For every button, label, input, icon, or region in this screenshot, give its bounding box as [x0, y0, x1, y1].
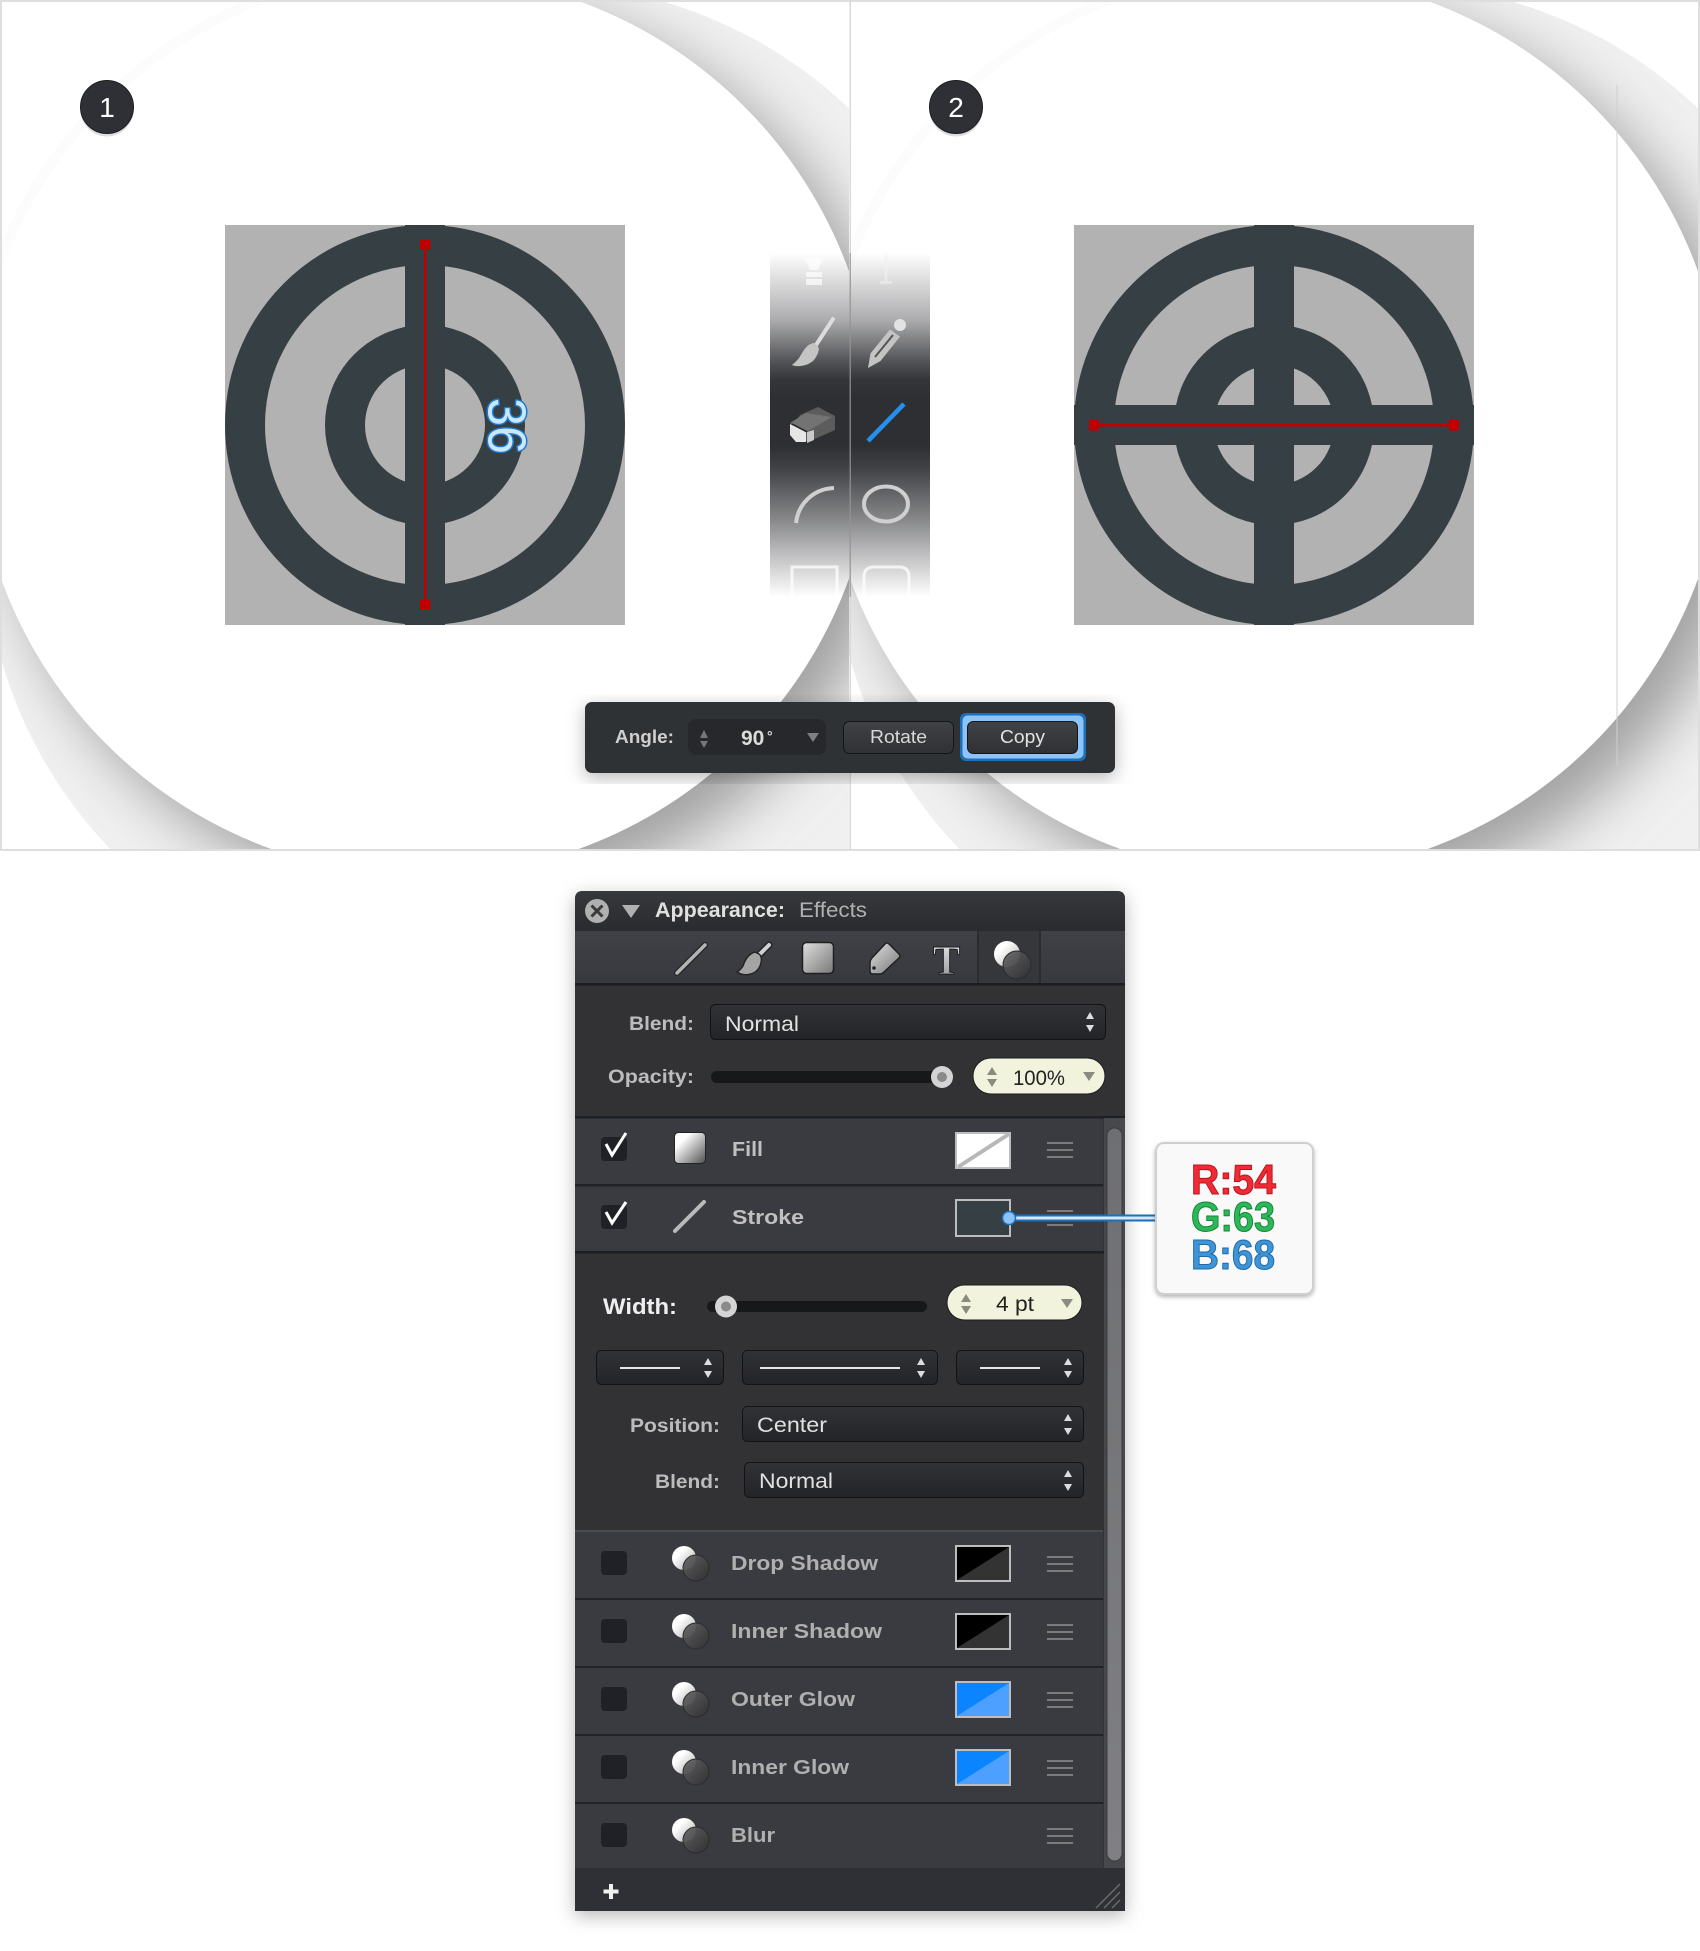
- dropdown: start arrow: [596, 1350, 724, 1384]
- callout: RGB values: G:63: [1191, 1193, 1275, 1240]
- grey artboard square 1: [225, 225, 625, 625]
- button: Copy focused: Copy: [1000, 727, 1045, 747]
- connector from stroke swatch to callout: [1002, 1212, 1156, 1224]
- label: Blend stroke: Blend:: [655, 1472, 720, 1493]
- panel: step 2: [818, 0, 1700, 904]
- scrollbar: [1104, 1118, 1125, 1868]
- icon: line tool, active blue: [868, 404, 904, 441]
- stroke settings section: [575, 1251, 1105, 1498]
- target icon 1: [245, 225, 605, 625]
- dropdown: Blend: [710, 1004, 1106, 1040]
- row: Stroke: [575, 1184, 1103, 1251]
- button: Rotate: [844, 722, 954, 754]
- icon: rectangle tool, faded: [792, 567, 837, 600]
- row: Outer Glow: [575, 1666, 1103, 1734]
- icon: eraser tool: [790, 407, 835, 443]
- title bar: Effects: [799, 899, 867, 922]
- panel 2 background with long shadow: [818, 0, 1700, 904]
- panel: step 1: [2, 2, 849, 849]
- step badge 2: [930, 80, 982, 136]
- icon: type tool, faded: [880, 253, 892, 284]
- toolbar strip with tools: [770, 253, 930, 600]
- panel 1 background with long shadow: [2, 2, 849, 849]
- row: Fill: Fill: [732, 1139, 763, 1161]
- icon: stroke tab: [677, 945, 705, 973]
- row: Inner Shadow: Inner Shadow: [731, 1621, 883, 1643]
- label: Width: Width:: [603, 1294, 677, 1319]
- rotate dialog bar: [585, 702, 1115, 773]
- title bar: [575, 891, 1125, 931]
- target icon 2: [1074, 225, 1474, 625]
- dropdown: end arrow: [956, 1350, 1084, 1384]
- step badge 2: 2: [948, 92, 964, 123]
- grey artboard square 2: [1074, 225, 1474, 625]
- measurement label 36: 36: [476, 398, 536, 454]
- angle field: °: [767, 728, 773, 744]
- title bar: Appearance:: [655, 899, 785, 922]
- row: Inner Glow: [575, 1734, 1103, 1802]
- footer with add button and grip: [575, 1868, 1125, 1911]
- row: Stroke: Stroke: [732, 1207, 804, 1229]
- callout: RGB values: R:54: [1191, 1156, 1277, 1203]
- label: Opacity: Opacity:: [608, 1067, 694, 1088]
- icon: pencil tool: [868, 319, 906, 368]
- angle field: 90: [741, 727, 764, 750]
- icon: arc tool: [796, 488, 834, 523]
- icon: fill tab: [802, 942, 834, 974]
- label: Blend: Blend:: [629, 1014, 694, 1035]
- dropdown: Position: Center: [757, 1414, 827, 1437]
- row: Outer Glow: Outer Glow: [731, 1689, 855, 1711]
- icon: paintbrush tool: [792, 319, 833, 366]
- row: Drop Shadow: Drop Shadow: [731, 1553, 879, 1575]
- step badge 1: 1: [99, 92, 115, 123]
- blend and opacity section: [608, 1004, 1106, 1094]
- button: Rotate: Rotate: [870, 727, 927, 747]
- row: Fill: [575, 1116, 1125, 1184]
- rotated red line with nodes: [1089, 420, 1459, 430]
- icon: eyedropper tool, faded: [805, 258, 823, 285]
- icon: rounded rectangle tool, faded: [864, 567, 909, 600]
- slider: opacity: [711, 1066, 953, 1088]
- slider: width: [707, 1296, 927, 1318]
- angle field: [688, 719, 826, 755]
- icon: effects tab: [994, 941, 1031, 979]
- icon: ellipse tool: [864, 486, 908, 522]
- field: width value: [947, 1285, 1082, 1320]
- dropdown: Blend stroke: [744, 1462, 1084, 1498]
- button: Copy focused: [960, 713, 1086, 761]
- step badge 1: [80, 80, 134, 136]
- dropdown: dash style: [742, 1350, 938, 1384]
- row: Blur: Blur: [731, 1825, 775, 1847]
- label: Angle: Angle:: [615, 727, 674, 747]
- callout: RGB values: B:68: [1191, 1231, 1275, 1278]
- dropdown: Blend stroke: Normal: [759, 1470, 833, 1493]
- field: opacity value: 100%: [1013, 1067, 1065, 1090]
- tab toolbar: [575, 931, 1125, 986]
- dropdown: Position: [742, 1406, 1084, 1442]
- field: opacity value: [973, 1058, 1105, 1094]
- row: Inner Shadow: [575, 1598, 1103, 1666]
- appearance panel: [575, 891, 1125, 1911]
- callout: RGB values: [1156, 1143, 1313, 1294]
- dropdown: Blend: Normal: [725, 1013, 799, 1036]
- row: Inner Glow: Inner Glow: [731, 1757, 850, 1779]
- field: width value: 4 pt: [996, 1293, 1034, 1316]
- row: Drop Shadow: [575, 1530, 1103, 1598]
- label: Position: Position:: [630, 1416, 720, 1437]
- row: Blur: [575, 1802, 1103, 1868]
- selected red line with nodes: [420, 240, 430, 610]
- icon: brush tab: [737, 945, 769, 975]
- icon: tag tab: [870, 943, 900, 974]
- icon: text tab: T: [933, 937, 960, 983]
